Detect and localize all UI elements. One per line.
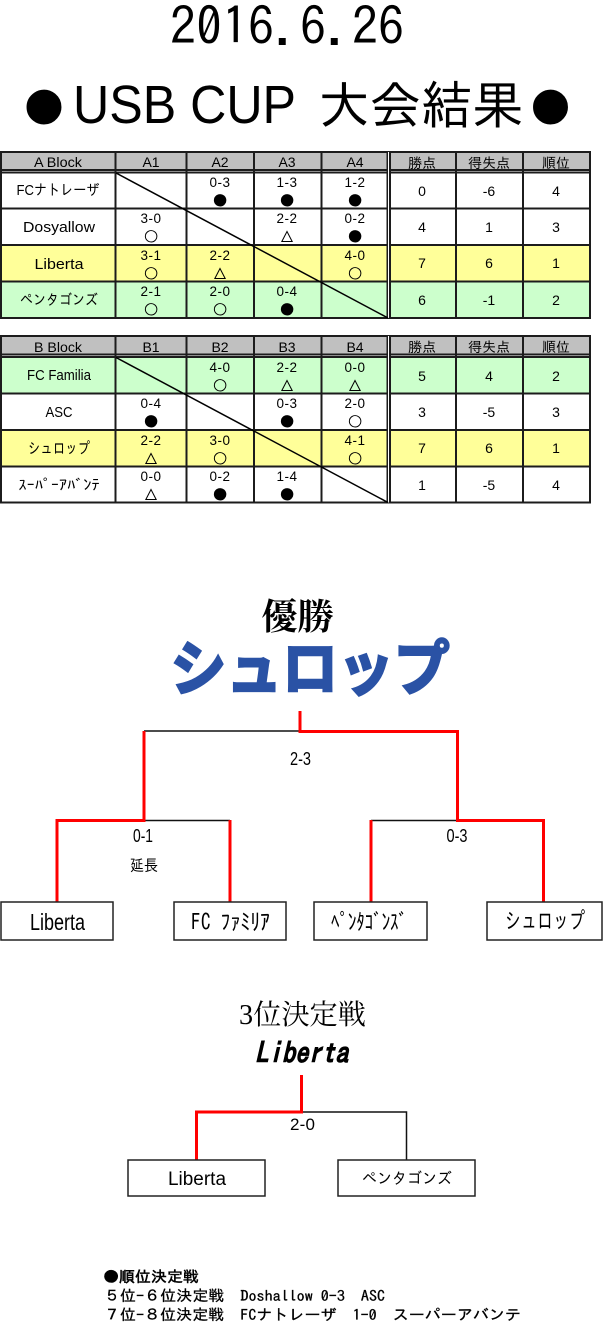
row: ASC: 3 xyxy=(418,404,426,420)
B Block header: B3 xyxy=(278,339,296,355)
A Block header: 勝点 xyxy=(408,156,436,170)
team box: FC ファミリア: FC ﾌｧﾐﾘｱ xyxy=(191,910,270,933)
panel: B Block table xyxy=(1,336,590,502)
row: Liberta: Liberta xyxy=(34,256,84,273)
team box: Liberta xyxy=(1,902,113,940)
team box: シュロップ xyxy=(487,902,602,940)
team box: Liberta: Liberta xyxy=(30,909,85,935)
date heading: 2016.6.26 xyxy=(170,0,404,52)
row: スーパーアバンテ: 4 xyxy=(552,477,560,493)
third place heading: 3位決定戦 xyxy=(239,999,366,1031)
row: Dosyallow: 3 xyxy=(552,219,560,235)
title xyxy=(23,75,572,135)
row: FCナトレーザ: 0-3 xyxy=(209,175,231,190)
row: FCナトレーザ: ● xyxy=(280,193,294,208)
A Block header: A Block xyxy=(34,154,83,170)
title: 大会結果 xyxy=(318,79,524,131)
row: シュロップ: ○ xyxy=(212,451,228,466)
row: スーパーアバンテ: 0-0 xyxy=(140,469,162,484)
row: FCナトレーザ: FCナトレーザ xyxy=(16,182,100,199)
row: FCナトレーザ: 0 xyxy=(418,183,426,199)
row: Dosyallow: Dosyallow xyxy=(23,219,95,236)
row: ペンタゴンズ: 2-0 xyxy=(209,284,231,299)
row: ASC: ASC xyxy=(46,404,73,421)
row: Dosyallow: ● xyxy=(348,229,362,244)
row: Dosyallow: 4 xyxy=(418,219,426,235)
B Block header: B2 xyxy=(211,339,229,355)
placement match results: ５位-６位決定戦 Doshallow 0-3 ASC xyxy=(104,1288,385,1303)
row: ASC: -5 xyxy=(483,404,495,420)
row: シュロップ: ○ xyxy=(348,451,362,466)
A Block header: A2 xyxy=(211,154,229,170)
title: USB CUP xyxy=(73,75,296,135)
row: ペンタゴンズ: 0-4 xyxy=(276,284,298,299)
row: Dosyallow: 0-2 xyxy=(344,211,366,226)
row: ペンタゴンズ: 6 xyxy=(418,292,426,308)
placement match results: ●順位決定戦 xyxy=(103,1269,199,1284)
score: semifinal 1: 0-1 xyxy=(133,826,153,846)
team box: ペンタゴンズ xyxy=(338,1160,475,1196)
row: ペンタゴンズ: -1 xyxy=(483,292,495,308)
B Block header: 勝点 xyxy=(408,340,436,354)
row: シュロップ: 7 xyxy=(418,440,426,456)
row: スーパーアバンテ: -5 xyxy=(483,477,495,493)
row: Dosyallow: 2-2 xyxy=(276,211,298,226)
row: ASC: ● xyxy=(144,414,158,429)
bracket lines xyxy=(57,711,544,902)
row: ASC: ○ xyxy=(348,414,362,429)
team box: FC ファミリア xyxy=(174,902,286,940)
placement match results: ７位-８位決定戦 FCナトレーザ 1-0 スーパーアバンテ xyxy=(104,1307,521,1322)
score: semifinal 2: 0-3 xyxy=(446,826,468,846)
row: FC Familia: 5 xyxy=(418,368,426,384)
row: FC Familia: 2 xyxy=(552,368,560,384)
row: スーパーアバンテ: 0-2 xyxy=(209,469,231,484)
row: FCナトレーザ: 1-2 xyxy=(344,175,366,190)
team box: ペンタゴンズ: ペンタゴンズ xyxy=(362,1170,452,1186)
row: FCナトレーザ xyxy=(16,175,560,208)
third place bracket xyxy=(128,1075,475,1196)
row: Liberta: 2-2 xyxy=(209,248,231,263)
placement match results xyxy=(103,1269,521,1322)
row: FCナトレーザ: ● xyxy=(212,193,228,208)
row: Dosyallow: ○ xyxy=(144,229,158,244)
row: シュロップ xyxy=(28,433,560,466)
A Block header: A4 xyxy=(346,154,364,170)
row: Dosyallow xyxy=(23,211,560,244)
row: ペンタゴンズ xyxy=(20,284,560,317)
row: Liberta: 3-1 xyxy=(140,248,162,263)
row: シュロップ: △ xyxy=(144,451,158,466)
B Block header xyxy=(34,339,570,355)
B Block row backgrounds xyxy=(1,336,590,466)
row: FCナトレーザ: -6 xyxy=(483,183,495,199)
row: ASC: ● xyxy=(280,414,294,429)
title: ● xyxy=(530,87,572,129)
third place lines xyxy=(196,1075,406,1160)
B Block header: B4 xyxy=(346,339,364,355)
row: FC Familia: 4-0 xyxy=(209,360,231,375)
row: スーパーアバンテ: ｽｰﾊﾟｰｱﾊﾞﾝﾃ xyxy=(18,477,100,492)
row: Liberta: ○ xyxy=(348,266,362,281)
row: スーパーアバンテ: △ xyxy=(144,487,158,502)
row: スーパーアバンテ: ● xyxy=(280,487,294,502)
row: Liberta: 4-0 xyxy=(344,248,366,263)
B Block header: B1 xyxy=(142,339,160,355)
row: ペンタゴンズ: 2 xyxy=(552,292,560,308)
A Block header: 得失点 xyxy=(468,156,510,170)
row: FC Familia: 2-2 xyxy=(276,360,298,375)
team box: ペンタゴンズ xyxy=(314,902,427,940)
row: ペンタゴンズ: ● xyxy=(280,302,294,317)
row: FCナトレーザ: 4 xyxy=(552,183,560,199)
row: ASC: 2-0 xyxy=(344,396,366,411)
row: ペンタゴンズ: 2-1 xyxy=(140,284,162,299)
row: FC Familia: 0-0 xyxy=(344,360,366,375)
row: FC Familia: 4 xyxy=(485,368,493,384)
row: FC Familia: △ xyxy=(348,378,362,393)
score: final: 2-3 xyxy=(290,749,311,769)
row: FCナトレーザ: 1-3 xyxy=(276,175,298,190)
row: スーパーアバンテ: 1 xyxy=(418,477,426,493)
row: ASC: 0-3 xyxy=(276,396,298,411)
row: Liberta: △ xyxy=(212,266,228,281)
row: FC Familia: △ xyxy=(280,378,294,393)
row: Liberta: 6 xyxy=(485,255,493,271)
A Block header: A1 xyxy=(142,154,160,170)
row: スーパーアバンテ: ● xyxy=(212,487,228,502)
B Block grid xyxy=(1,336,590,502)
row: ペンタゴンズ: ペンタゴンズ xyxy=(20,292,98,307)
team box: ペンタゴンズ: ﾍﾟﾝﾀｺﾞﾝｽﾞ xyxy=(331,910,407,933)
row: スーパーアバンテ: 1-4 xyxy=(276,469,298,484)
row: ペンタゴンズ: ○ xyxy=(212,302,228,317)
title: ● xyxy=(23,87,65,129)
row: シュロップ: 4-1 xyxy=(344,433,366,448)
row: Dosyallow: △ xyxy=(280,229,294,244)
third place winner: Liberta xyxy=(255,1038,349,1067)
row: ペンタゴンズ: ○ xyxy=(144,302,158,317)
row: シュロップ: 6 xyxy=(485,440,493,456)
row: シュロップ: 1 xyxy=(552,440,560,456)
B Block header: B Block xyxy=(34,339,83,355)
row: Liberta: ○ xyxy=(144,266,158,281)
B Block header: 得失点 xyxy=(468,340,510,354)
row: Dosyallow: 1 xyxy=(485,219,493,235)
B Block header: 順位 xyxy=(542,340,570,354)
A Block grid xyxy=(1,152,590,318)
A Block header xyxy=(34,154,570,170)
panel: A Block table xyxy=(1,152,590,318)
A Block header: A3 xyxy=(278,154,296,170)
row: Dosyallow: 3-0 xyxy=(140,211,162,226)
row: Liberta: 7 xyxy=(418,255,426,271)
score: third place: 2-0 xyxy=(290,1115,315,1134)
row: スーパーアバンテ xyxy=(18,469,560,502)
row: シュロップ: 3-0 xyxy=(209,433,231,448)
tournament bracket xyxy=(1,711,602,940)
row: Liberta: 1 xyxy=(552,255,560,271)
row: Liberta xyxy=(34,248,560,281)
row: FC Familia xyxy=(27,360,560,393)
row: シュロップ: 2-2 xyxy=(140,433,162,448)
row: FC Familia: ○ xyxy=(212,378,228,393)
A Block header: 順位 xyxy=(542,156,570,170)
row: ASC: 3 xyxy=(552,404,560,420)
team box: Liberta xyxy=(128,1160,265,1196)
row: シュロップ: シュロップ xyxy=(28,440,90,456)
note: extra time: 延長 xyxy=(130,857,158,873)
winner heading: 優勝 xyxy=(261,589,334,640)
row: ASC: 0-4 xyxy=(140,396,162,411)
team box: Liberta: Liberta xyxy=(168,1169,226,1190)
A Block row backgrounds xyxy=(1,152,590,318)
row: FC Familia: FC Familia xyxy=(27,367,92,384)
row: FCナトレーザ: ● xyxy=(348,193,362,208)
winner name: シュロップ xyxy=(170,621,450,708)
row: ASC xyxy=(46,396,560,429)
